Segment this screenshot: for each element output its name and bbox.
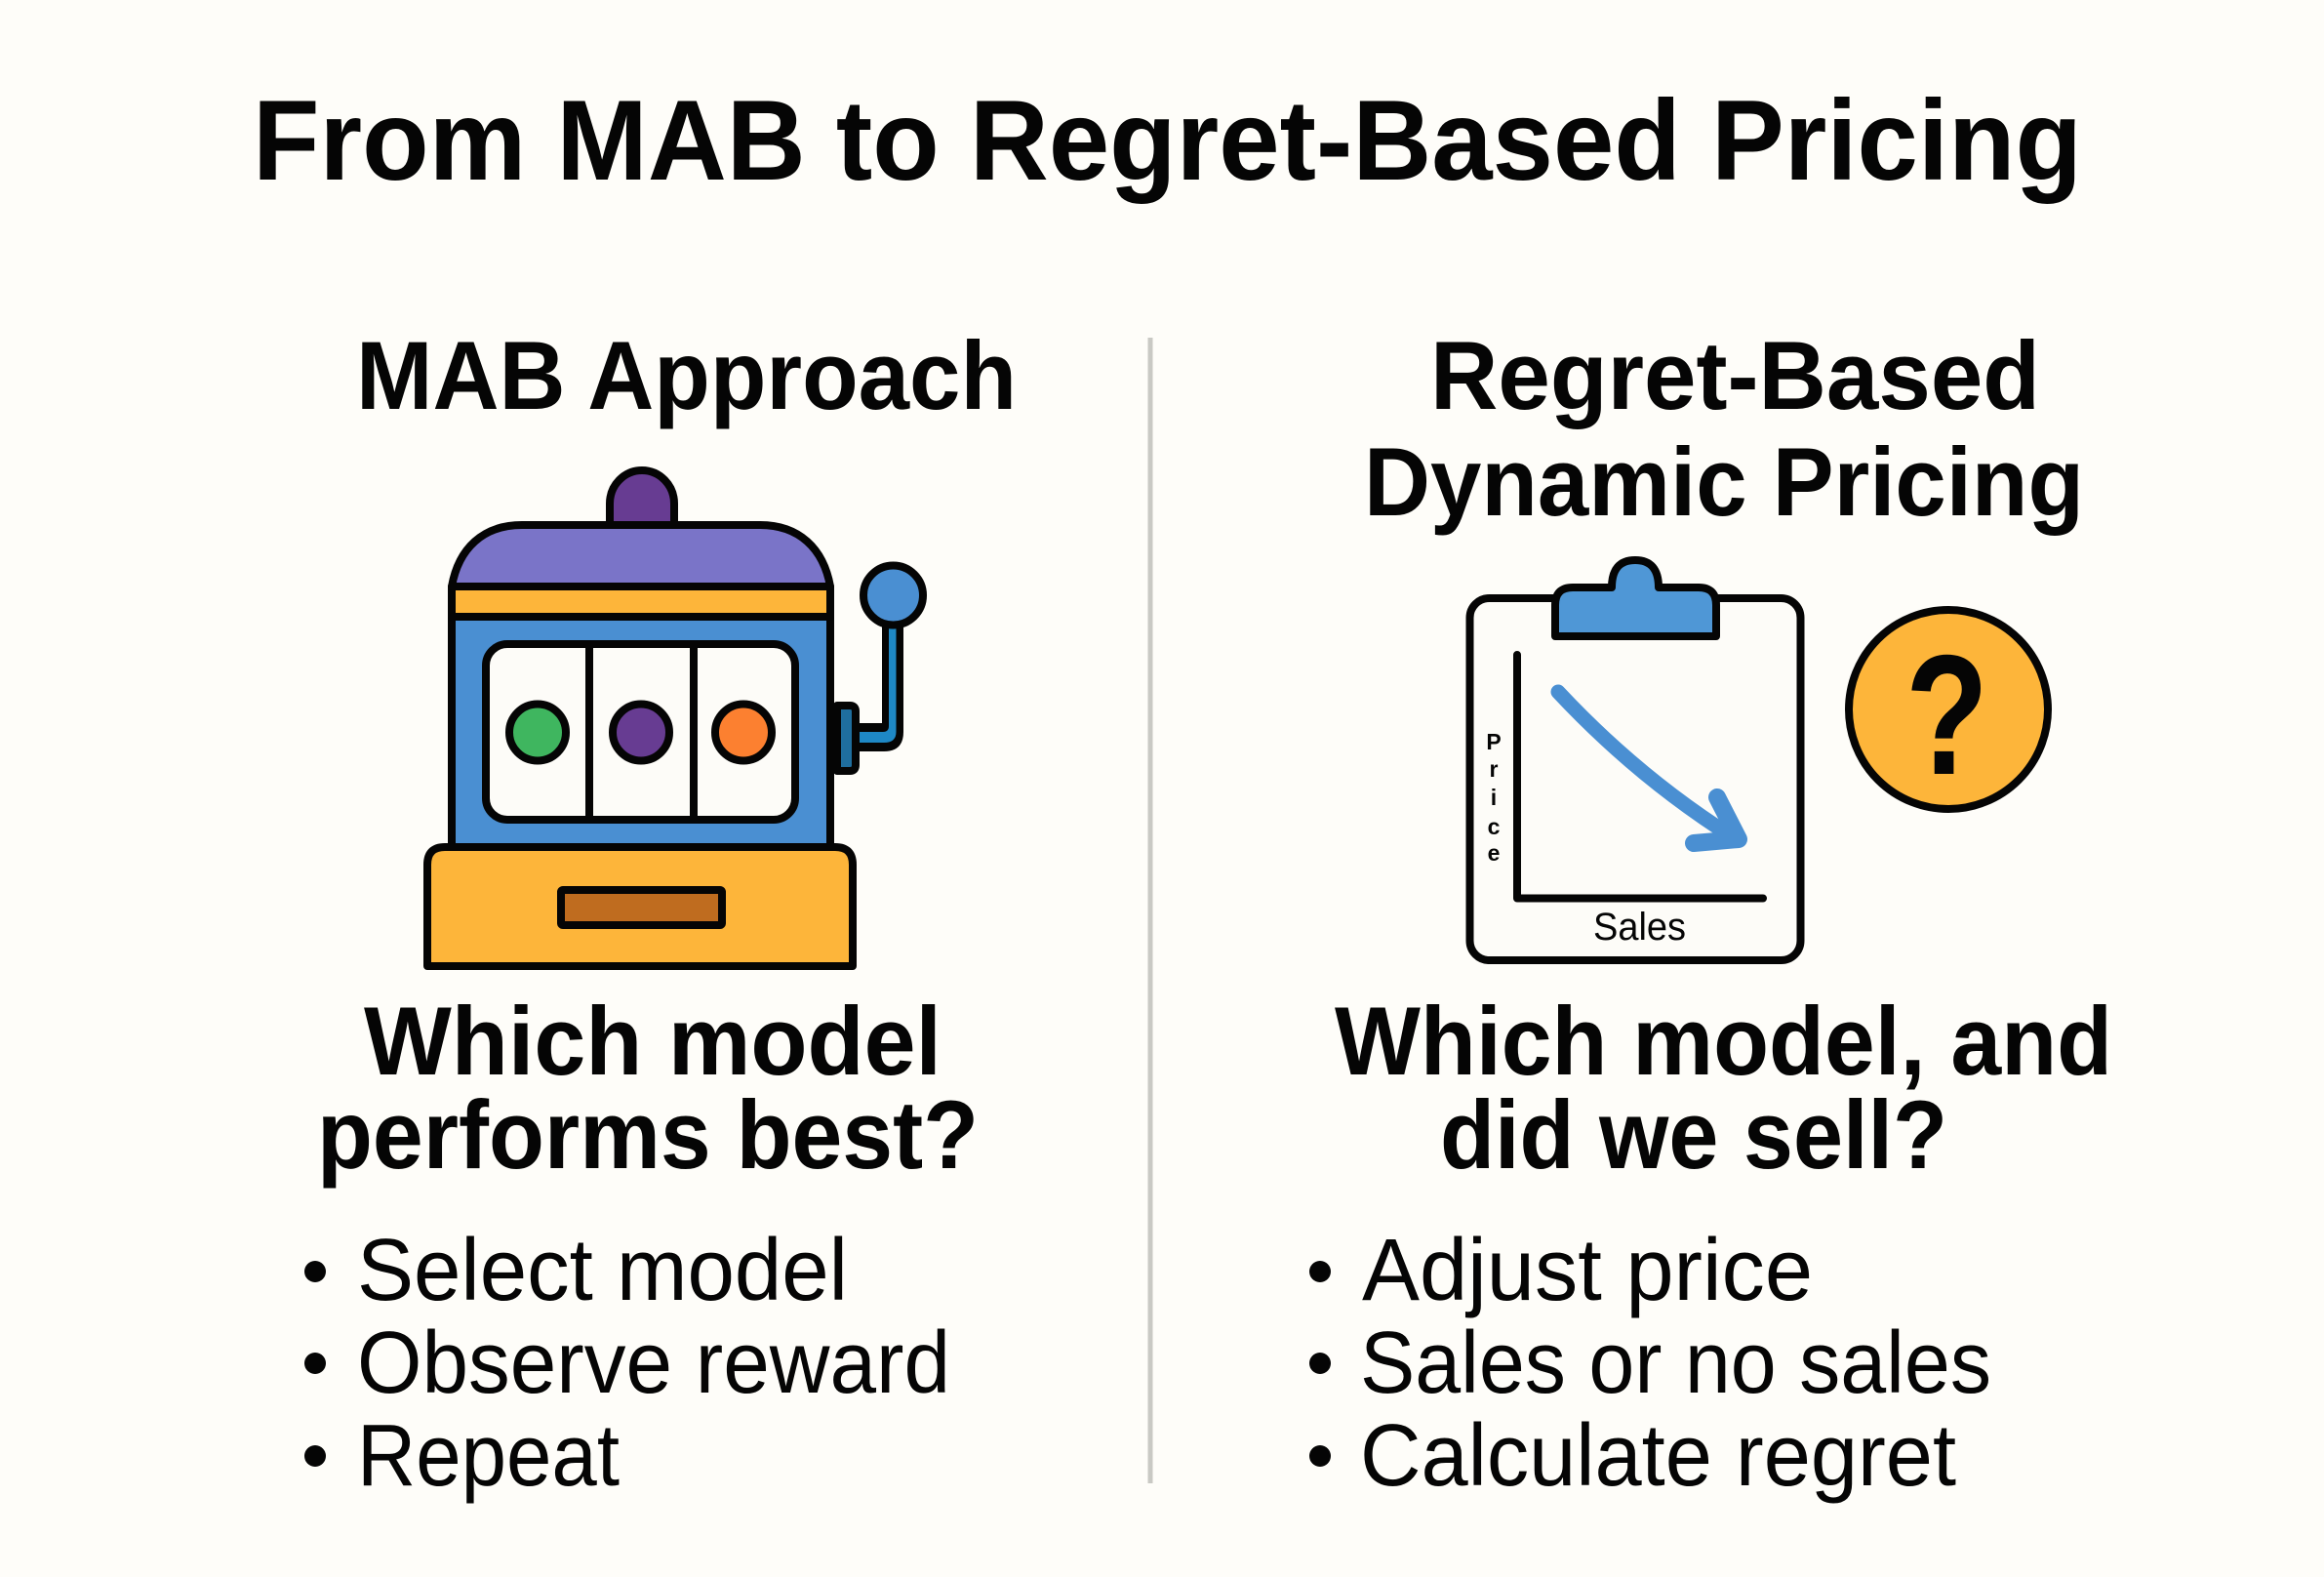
yellow band [452, 586, 830, 617]
bullet list: MAB steps: Observe reward [357, 1314, 950, 1412]
base [427, 847, 853, 966]
bullet list: MAB steps: Select model [357, 1222, 848, 1319]
bullet list: regret steps [1309, 1222, 1991, 1505]
title: From MAB to Regret-Based Pricing [253, 76, 2082, 204]
heading: Regret-Based Dynamic Pricing: Dynamic Pricing [1364, 427, 2084, 536]
chart axes [1517, 655, 1763, 898]
heading: Regret-Based Dynamic Pricing: Regret-Based [1430, 321, 2040, 429]
bullet list: regret steps: Calculate regret [1360, 1407, 1956, 1505]
icon: question mark circle [1849, 610, 2048, 811]
panel: MAB approach [304, 321, 1017, 1505]
clipboard board [1469, 598, 1801, 960]
dome [452, 525, 830, 586]
knob on top [610, 470, 674, 525]
subheading: Which model performs best?: performs best? [317, 1080, 979, 1189]
cabinet body [452, 617, 830, 847]
panel: regret-based dynamic pricing [1309, 321, 2112, 1505]
lever [837, 566, 923, 771]
bullet list: MAB steps: Repeat [357, 1407, 620, 1505]
bullet list: regret steps: Sales or no sales [1360, 1314, 1991, 1412]
axis label: Price: i [1491, 785, 1497, 810]
heading: Regret-Based Dynamic Pricing [1364, 321, 2084, 536]
axis label: Price: c [1488, 814, 1501, 839]
subheading: Which model performs best?: Which model [364, 987, 942, 1095]
clipboard clip [1555, 560, 1716, 636]
axis label: Price: r [1490, 756, 1499, 782]
bullet list: regret steps: Adjust price [1362, 1222, 1813, 1319]
axis label: Price [1486, 729, 1502, 866]
axis label: Sales: Sales [1593, 906, 1686, 949]
icon: slot machine [427, 470, 923, 966]
subheading: Which model, and did we sell?: did we sell? [1440, 1080, 1947, 1189]
axis label: Price: e [1488, 840, 1500, 866]
heading: MAB Approach: MAB Approach [356, 321, 1017, 429]
subheading: Which model performs best? [317, 987, 979, 1189]
arrow: falling price [1558, 692, 1739, 843]
reel window [486, 644, 795, 820]
subheading: Which model, and did we sell? [1335, 987, 2112, 1189]
subheading: Which model, and did we sell?: Which model, and [1335, 987, 2112, 1095]
coin slot [561, 890, 722, 925]
axis label: Price: P [1486, 729, 1502, 754]
icon: question mark circle: ? [1905, 621, 1988, 811]
icon: clipboard with price chart [1469, 560, 1801, 960]
bullet list: MAB steps [304, 1222, 950, 1505]
